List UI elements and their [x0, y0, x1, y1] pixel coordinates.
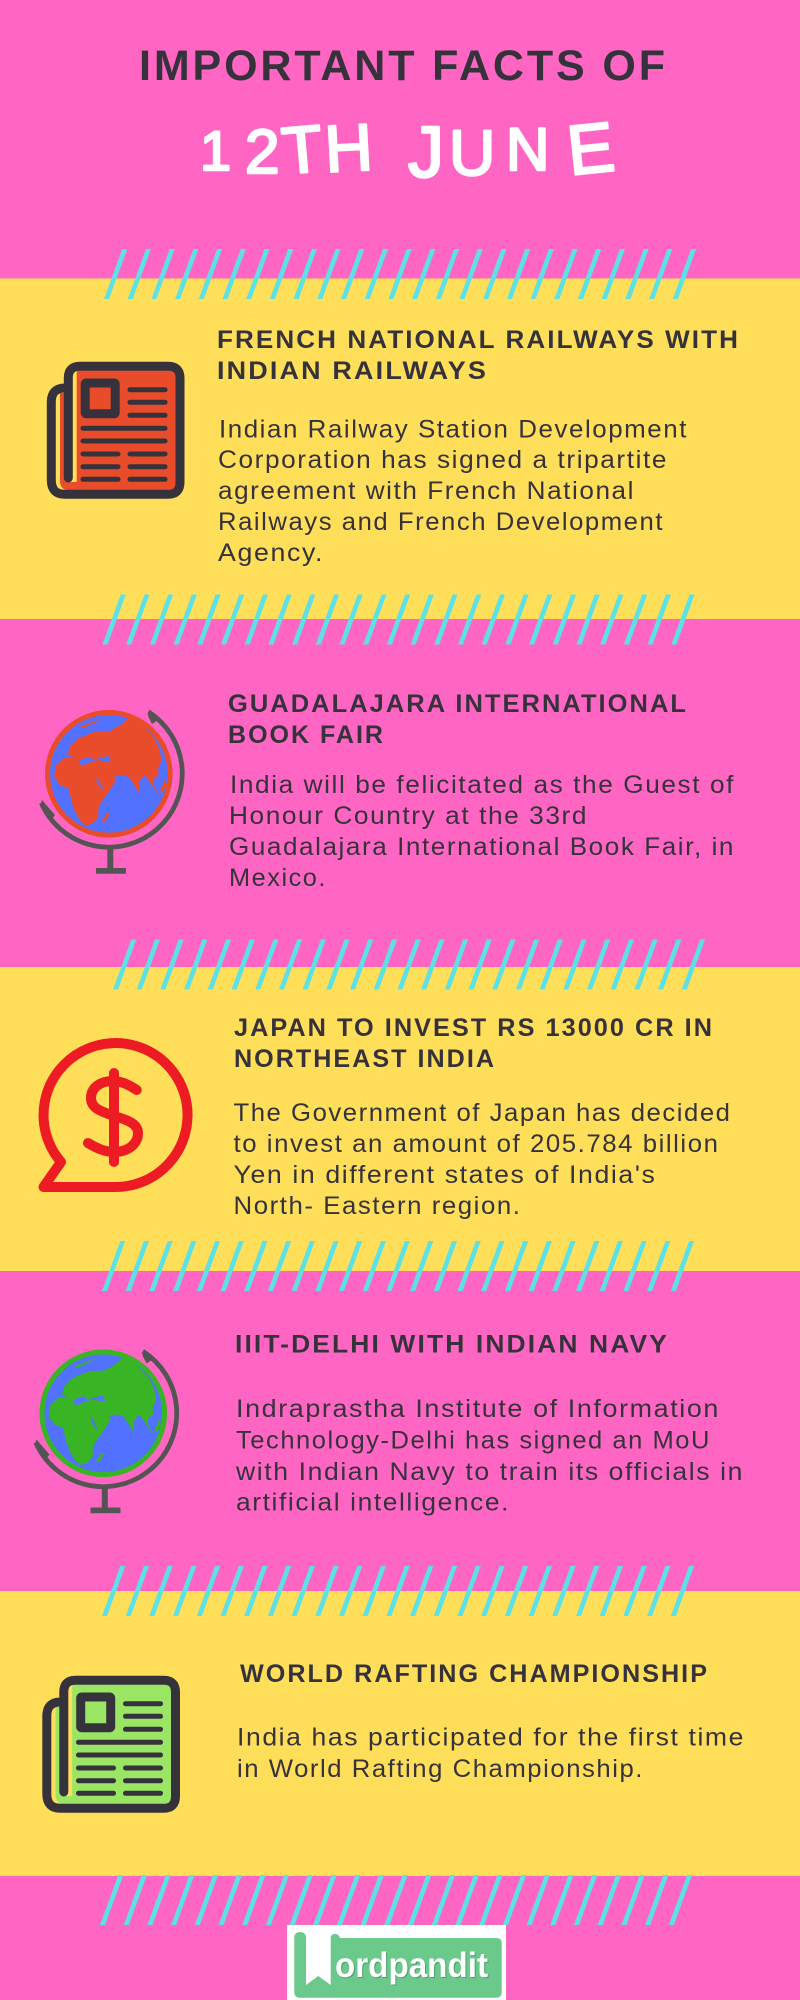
panel: Guadalajara Book Fair: [0, 619, 800, 967]
heading: FRENCH NATIONAL RAILWAYS WITH: [217, 326, 740, 354]
icon: newspaper red: [51, 366, 180, 494]
heading: NORTHEAST INDIA: [234, 1045, 496, 1073]
title: date: E: [563, 107, 618, 190]
panel: French National Railways: [0, 278, 800, 619]
panel: Japan to invest: [0, 967, 800, 1271]
icon: globe red: [40, 710, 182, 874]
heading: INDIAN RAILWAYS: [217, 357, 488, 385]
heading: [234, 1014, 714, 1073]
body text: Agency.: [218, 539, 324, 567]
title: date: J: [408, 113, 444, 193]
body text: India will be felicitated as the Guest of: [230, 771, 735, 799]
body text: The Government of Japan has decided: [234, 1099, 732, 1127]
title: date: U: [449, 117, 495, 189]
body text: to invest an amount of 205.784 billion: [234, 1130, 720, 1158]
body text: agreement with French National: [218, 477, 635, 505]
heading: GUADALAJARA INTERNATIONAL: [228, 690, 688, 718]
body text: Honour Country at the 33rd: [229, 802, 588, 830]
body text: India has participated for the first time: [237, 1724, 745, 1752]
panel: footer: [0, 1876, 800, 2000]
body text: in World Rafting Championship.: [237, 1755, 644, 1783]
title: date: 1: [200, 119, 231, 182]
icon: globe green: [34, 1350, 177, 1513]
logo wordmark: ordpandit: [335, 1946, 488, 1985]
panel: header: [0, 0, 800, 278]
panel: IIIT-Delhi: [0, 1271, 800, 1591]
title: date: H: [323, 110, 374, 186]
heading: IIIT-DELHI WITH INDIAN NAVY: [235, 1330, 669, 1358]
body text: Indraprastha Institute of Information: [236, 1395, 720, 1423]
logo: wordpandit: [287, 1925, 506, 2000]
heading: [228, 690, 688, 749]
title: important facts of: IMPORTANT FACTS OF: [139, 42, 665, 90]
title: date: N: [506, 116, 549, 183]
body text: Corporation has signed a tripartite: [218, 446, 668, 474]
body text: Yen in different states of India's: [234, 1161, 656, 1189]
body text: Technology-Delhi has signed an MoU: [236, 1426, 711, 1454]
icon: dollar speech bubble: [44, 1043, 188, 1187]
body text: [229, 771, 735, 892]
heading: JAPAN TO INVEST RS 13000 CR IN: [234, 1014, 714, 1042]
body text: with Indian Navy to train its officials in: [235, 1458, 744, 1486]
body text: [234, 1099, 732, 1220]
body text: North- Eastern region.: [234, 1192, 522, 1220]
body text: Railways and French Development: [218, 508, 664, 536]
body text: [237, 1724, 745, 1783]
body text: Indian Railway Station Development: [219, 416, 688, 444]
heading: BOOK FAIR: [228, 721, 385, 749]
body text: [218, 416, 688, 567]
body text: Mexico.: [229, 864, 327, 892]
body text: artificial intelligence.: [236, 1488, 510, 1516]
body text: [235, 1395, 744, 1516]
heading: WORLD RAFTING CHAMPIONSHIP: [240, 1660, 709, 1688]
heading: [217, 326, 740, 385]
panel: World Rafting Championship: [0, 1591, 800, 1876]
title: date: 2: [245, 118, 279, 187]
title: date: T: [279, 111, 325, 188]
body text: Guadalajara International Book Fair, in: [229, 833, 735, 861]
icon: newspaper green: [47, 1680, 175, 1808]
